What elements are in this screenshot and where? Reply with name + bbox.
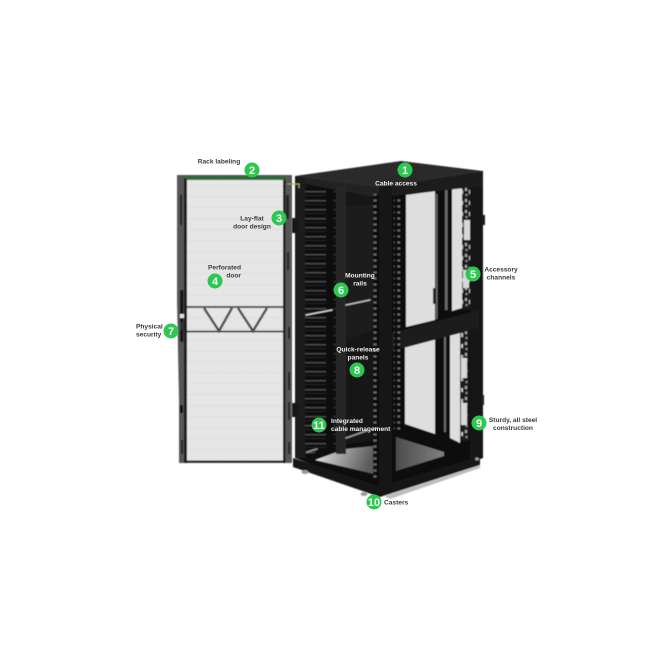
label: accessory channels: Accessory — [484, 266, 518, 274]
interior back wall — [345, 192, 374, 445]
front corner post — [379, 185, 392, 492]
perforated side panel upper front — [406, 191, 435, 327]
label: perforated door: door — [226, 272, 241, 280]
rack label strip — [186, 176, 285, 180]
badge 4: 4 — [212, 276, 219, 288]
label: sturdy all steel construction: Sturdy, all steel — [489, 417, 537, 424]
badge 6 — [334, 282, 348, 298]
badge 8: 8 — [354, 365, 360, 377]
badge 9: 9 — [476, 418, 482, 430]
rear side handles — [481, 215, 485, 405]
right rear post — [470, 171, 483, 462]
badge 9 — [472, 416, 486, 430]
door cross brace — [187, 307, 283, 332]
label: physical security: Physical — [136, 324, 163, 330]
badge 7 — [164, 324, 178, 338]
door frame — [177, 175, 292, 463]
label: accessory channels: channels — [487, 274, 516, 282]
badge 3 — [272, 210, 286, 226]
label: cable access: Cable access — [375, 180, 417, 188]
hinge — [292, 218, 298, 233]
cable tie — [287, 184, 299, 188]
interior lighter upper panel — [347, 204, 373, 340]
frame inner shadow right — [283, 178, 286, 463]
badge 6: 6 — [338, 285, 344, 297]
badge 1: 1 — [402, 165, 408, 177]
integrated cable manager — [305, 186, 335, 456]
badge 10 — [366, 494, 382, 510]
mid crossbar right face — [392, 310, 479, 351]
label: rack labeling: Rack labeling — [198, 158, 240, 166]
rack top surface — [295, 161, 483, 187]
badge 7: 7 — [168, 326, 174, 338]
floor inside rack — [315, 446, 374, 474]
label: perforated door: Perforated — [208, 264, 241, 272]
label: physical security: security — [136, 332, 162, 338]
casters — [302, 458, 479, 496]
label: lay-flat door design: Lay-flat — [240, 216, 264, 222]
right floor — [396, 437, 444, 471]
label: integrated cable management: cable management — [331, 426, 391, 433]
door perforated mesh — [187, 180, 283, 462]
open perforated door — [177, 175, 292, 463]
rack cabinet — [287, 161, 485, 499]
label: quick-release panels: Quick-release — [336, 346, 380, 354]
base plinth — [293, 456, 480, 497]
lower hinge — [292, 403, 298, 417]
perforated side panel upper rear — [452, 188, 462, 311]
badge 8 — [350, 362, 364, 378]
badge 11: 11 — [313, 420, 325, 432]
door latch on side panel — [433, 288, 436, 304]
rack body left face backing — [295, 176, 380, 490]
perforated side panel lower front — [405, 333, 435, 434]
badge 5 — [466, 266, 480, 282]
wide vertical post — [336, 186, 346, 454]
top header band left — [295, 176, 380, 198]
mounting rail holes — [373, 194, 379, 480]
badge 1 — [398, 162, 412, 178]
label: lay-flat door design: door design — [233, 224, 271, 230]
badge 2 — [244, 162, 260, 178]
rack body right face backing — [380, 171, 483, 492]
label: casters: Casters — [384, 500, 409, 506]
badge 4 — [208, 274, 222, 288]
second vertical rail — [394, 197, 400, 432]
label: integrated cable management: Integrated — [331, 418, 363, 425]
top header band right — [380, 171, 483, 198]
perforated side panel lower rear — [450, 328, 460, 443]
label: mounting rails: rails — [353, 280, 367, 288]
narrow light strips — [436, 190, 448, 432]
label: quick-release panels: panels — [348, 354, 369, 362]
left front post — [295, 176, 305, 458]
label: mounting rails: Mounting — [345, 272, 375, 280]
door lock handle — [180, 290, 184, 413]
badge 2: 2 — [249, 165, 255, 177]
shadow below base — [384, 465, 480, 499]
door bottom edge — [187, 460, 283, 462]
frame inner shadow left — [184, 178, 187, 463]
badge 3: 3 — [276, 213, 282, 225]
badge 10: 10 — [368, 497, 380, 509]
label: sturdy all steel construction: construction — [493, 425, 533, 432]
door mesh bands — [187, 180, 283, 462]
rack rails highlights — [306, 300, 370, 452]
badge 5: 5 — [470, 269, 476, 281]
badge 11 — [312, 418, 326, 432]
door frame slots — [180, 195, 290, 454]
accessory channel — [460, 187, 470, 441]
